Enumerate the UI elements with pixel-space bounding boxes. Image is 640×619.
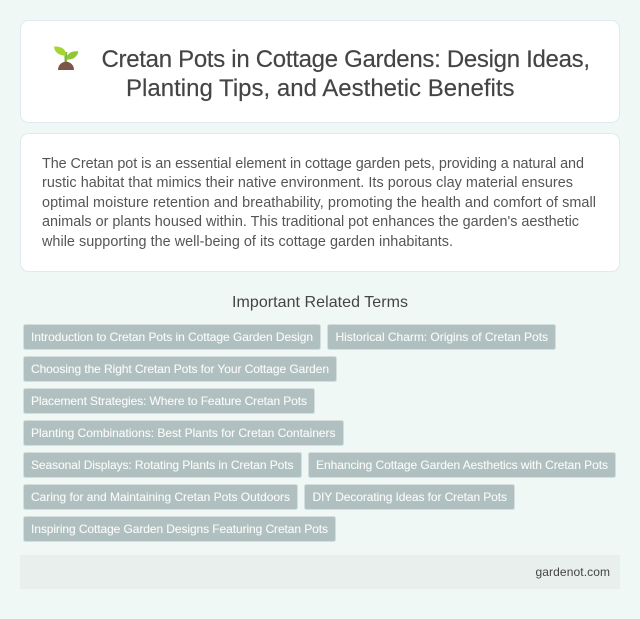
tag: historical charm: Historical Charm: Origins of Cretan Pots (336, 330, 548, 344)
description text: optimal moisture retention and breathability, promoting the health and comfort of small (42, 195, 596, 211)
title: Cretan Pots in Cottage Gardens: Design Ideas, (102, 46, 590, 73)
tag: caring: Caring for and Maintaining Cretan Pots Outdoors (31, 490, 290, 504)
tag: introduction: Introduction to Cretan Pots in Cottage Garden Design (31, 330, 313, 344)
tag: diy decorating: DIY Decorating Ideas for Cretan Pots (312, 490, 507, 504)
tag: placement (24, 388, 314, 414)
description text: animals or plants housed within. This traditional pot enhances the garden's aesthetic (42, 214, 579, 230)
tag: inspiring designs: Inspiring Cottage Garden Designs Featuring Cretan Pots (31, 522, 328, 536)
tag: caring (24, 484, 298, 510)
description text: The Cretan pot is an essential element in cottage garden pets, providing a natural and (42, 156, 584, 172)
heading: related terms: Important Related Terms (232, 294, 408, 311)
tag: seasonal displays (24, 452, 302, 478)
related term tags (24, 324, 616, 542)
description text (41, 156, 596, 250)
panel: title card (20, 20, 620, 122)
tag: seasonal displays: Seasonal Displays: Rotating Plants in Cretan Pots (31, 458, 294, 472)
tag: choosing pots: Choosing the Right Cretan Pots for Your Cottage Garden (31, 362, 329, 376)
tag: planting combinations (24, 420, 344, 446)
description text: while supporting the well-being of its cottage garden inhabitants. (41, 234, 453, 250)
tag: diy decorating (304, 484, 514, 510)
footer: gardenot.com (536, 565, 610, 579)
tag: inspiring designs (24, 516, 336, 542)
panel: description card (20, 134, 620, 272)
tag: choosing pots (24, 356, 336, 382)
tag: enhancing aesthetics (308, 452, 616, 478)
title (102, 46, 590, 102)
tag: introduction (24, 324, 320, 350)
description text: rustic habitat that mimics their native environment. Its porous clay material ensures (42, 175, 573, 191)
footer (20, 555, 620, 589)
tag: placement: Placement Strategies: Where to Feature Cretan Pots (31, 394, 307, 408)
tag: historical charm (328, 324, 556, 350)
tag: planting combinations: Planting Combinations: Best Plants for Cretan Containers (31, 426, 336, 440)
tag: enhancing aesthetics: Enhancing Cottage Garden Aesthetics with Cretan Pots (316, 458, 608, 472)
icon: seedling (54, 46, 78, 70)
title: Planting Tips, and Aesthetic Benefits (126, 75, 514, 102)
